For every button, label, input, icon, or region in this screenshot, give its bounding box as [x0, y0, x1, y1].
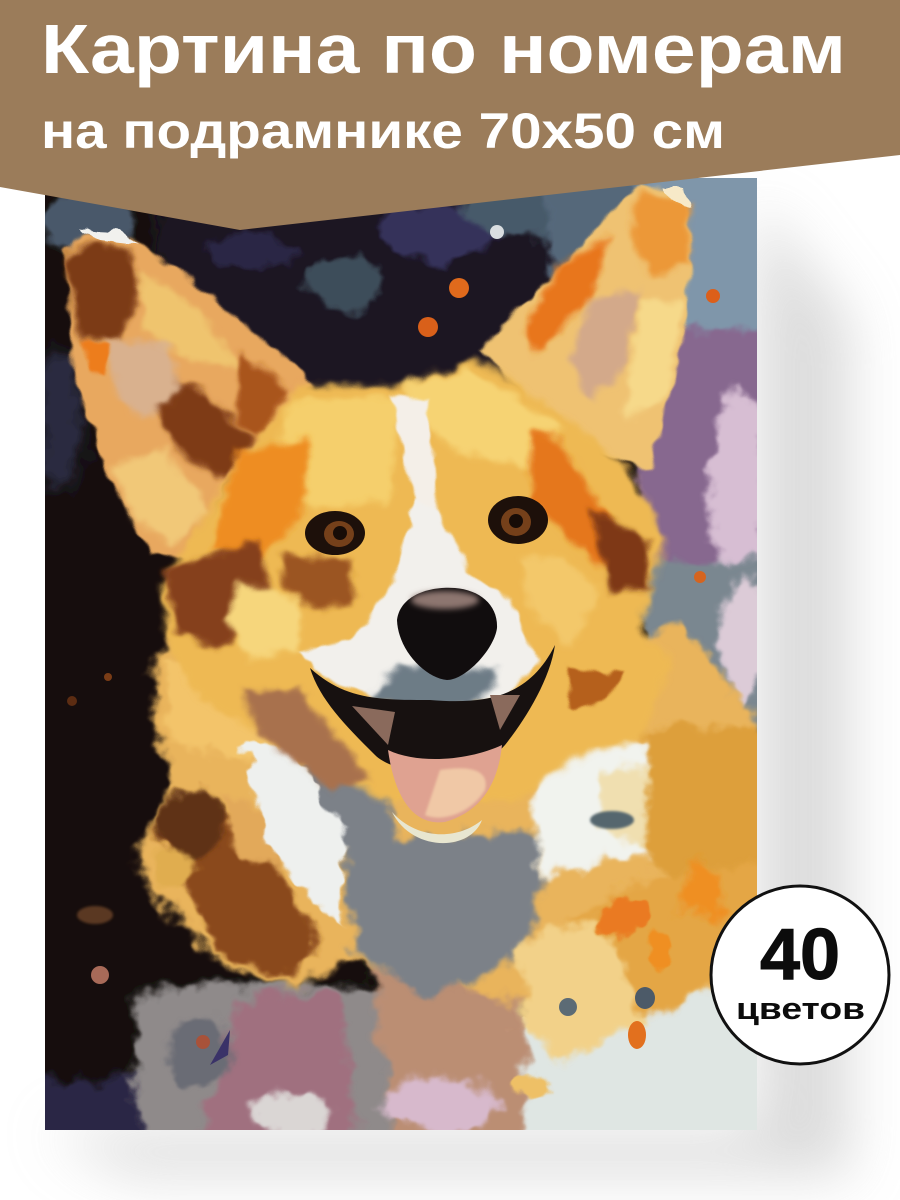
painting background	[45, 178, 757, 1130]
banner	[0, 0, 900, 230]
canvas drop shadow	[45, 200, 850, 1175]
eyes	[305, 496, 548, 555]
open mouth and tongue	[310, 645, 555, 843]
subheading: на подрамнике 70х50 см	[41, 103, 725, 159]
heading: Картина по номерам	[41, 10, 846, 88]
badge: 40 colors	[711, 886, 889, 1064]
badge number: 40	[760, 915, 840, 995]
nose	[397, 588, 497, 680]
right ear	[480, 185, 692, 470]
dog body fur	[135, 600, 770, 1097]
badge label: цветов	[736, 991, 865, 1026]
left ear	[65, 228, 315, 560]
dog head	[160, 360, 670, 800]
painting: corgi portrait	[45, 178, 757, 1130]
paint splatters	[67, 225, 720, 1065]
